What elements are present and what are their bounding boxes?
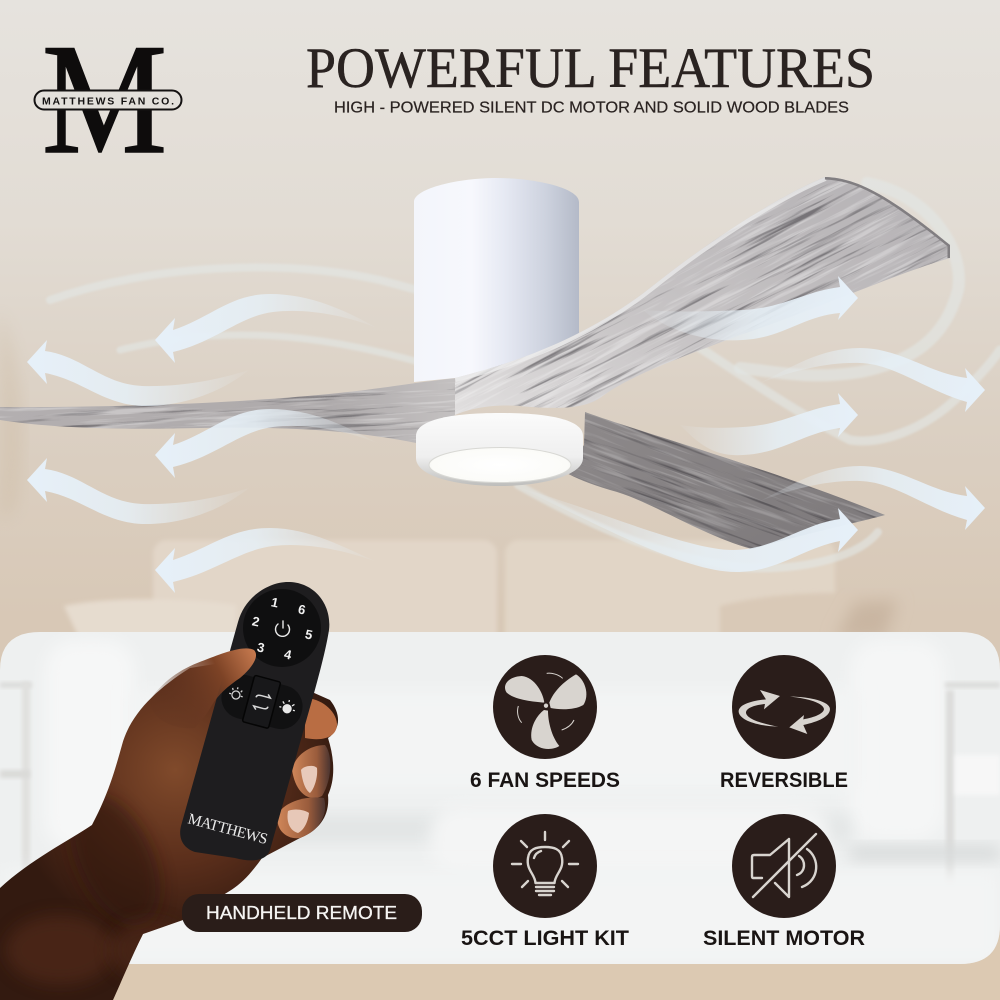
title: POWERFUL FEATURES [306,37,875,100]
panel: blurred white sofa feature panel [0,632,1000,964]
keypad numbers: 1 [270,594,280,611]
fan blade: left [0,378,455,443]
icon: light down [228,685,245,701]
arrow: right lower [520,488,858,572]
remote brand text: MATTHEWS [186,810,270,848]
logo: Matthews Fan Co: MATTHEWS FAN CO. [42,96,174,108]
hand and forearm [0,640,345,1000]
arrow: far left upper [27,340,249,406]
feature: reversible [720,655,848,792]
fan blade: lower right [568,412,885,549]
feature: 5CCT light kit [461,814,629,950]
keypad numbers [251,594,314,663]
label: SILENT MOTOR [703,927,865,950]
icon: rotating arrows [732,655,836,759]
logo: Matthews Fan Co: M [42,13,167,187]
icon: reverse [253,691,271,713]
arrow: left middle [155,409,377,478]
icon: light up [278,698,297,715]
light kit ring and lens [416,413,583,486]
ceiling fan [0,3,1000,671]
remote label pill [182,894,422,932]
keypad disc [243,589,321,667]
arrow: far left lower [27,458,249,524]
remote control [150,582,329,860]
arrow: far right upper [760,348,985,412]
arrow: right middle [680,393,858,455]
remote body [180,582,329,860]
ring fingernail [287,810,309,833]
label: REVERSIBLE [720,769,848,792]
thumb [150,648,256,728]
motor housing [414,178,579,382]
keypad numbers: 2 [251,613,261,630]
arrow: left lower [155,528,377,593]
ring finger [277,797,325,838]
index finger [305,698,337,739]
arrow: left upper [155,294,377,363]
remote label pill: HANDHELD REMOTE [206,902,397,923]
arrow: far right lower [760,466,985,530]
subtitle: HIGH - POWERED SILENT DC MOTOR AND SOLID WOOD BLADES [334,100,849,116]
feature: 6 fan speeds [470,655,620,792]
icon: muted speaker [732,814,836,918]
faint air swirl bands [50,183,1000,568]
keypad numbers: 5 [304,626,314,643]
icon: light bulb [493,814,597,918]
icon: fan [493,655,597,759]
middle finger [292,745,330,798]
background: blurred plant and sofa [0,310,1000,1000]
function buttons [216,668,308,736]
air flow arrows [27,276,985,593]
middle fingernail [301,766,317,793]
label: 6 FAN SPEEDS [470,769,620,792]
keypad numbers: 4 [283,646,294,663]
label: 5CCT LIGHT KIT [461,927,629,950]
fan blade: upper right [455,177,950,415]
arrow: right upper [643,276,858,340]
keypad numbers: 3 [256,639,266,656]
feature: silent motor [703,814,865,950]
power symbol [276,621,290,636]
hand holding remote [0,640,345,1000]
keypad numbers: 6 [297,601,307,618]
